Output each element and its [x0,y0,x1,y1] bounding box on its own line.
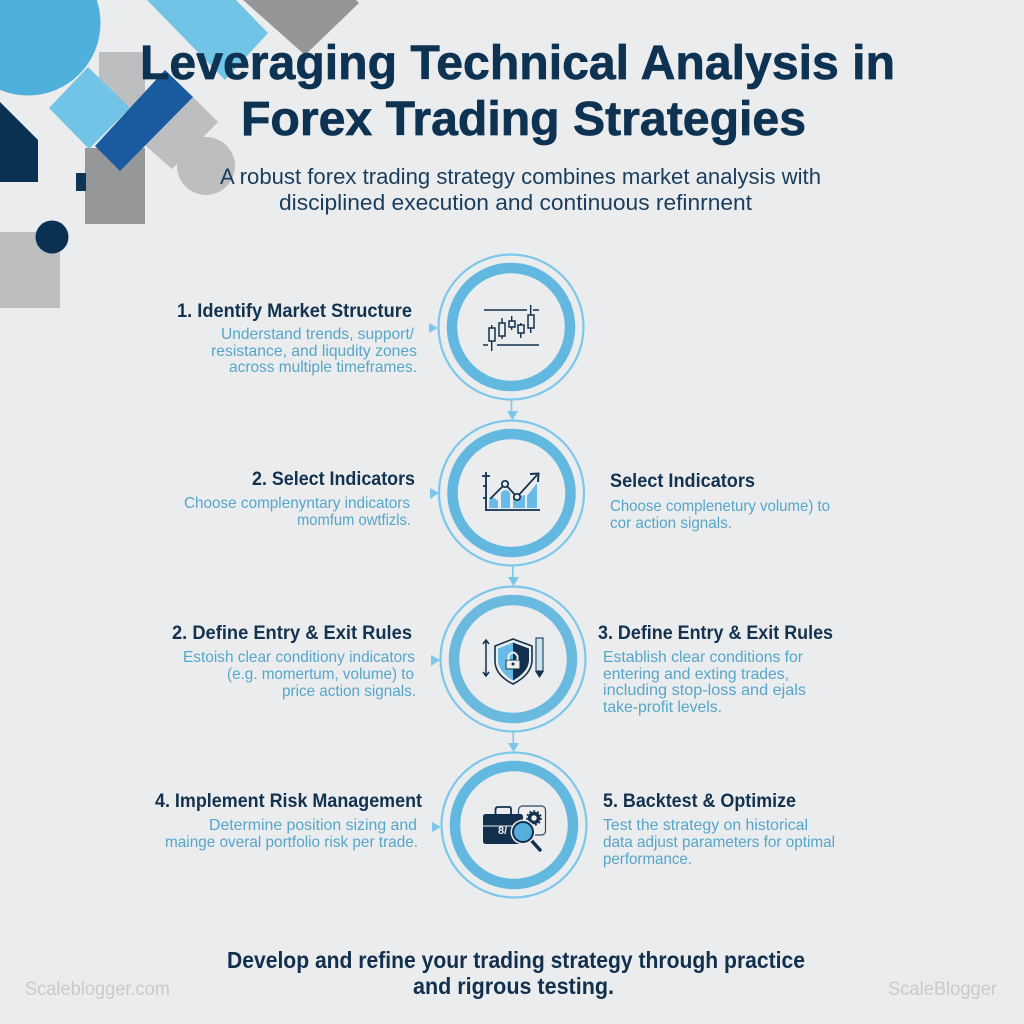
step 3 text, left [172,623,416,700]
title: Leveraging Technical Analysis in [140,36,895,90]
icon: shield with padlock and ruler [483,638,544,684]
step 4 text, left: mainge overal portfolio risk per trade. [165,834,418,851]
step 3 text, left: 2. Define Entry & Exit Rules [172,623,412,644]
step 4 text, left: Determine position sizing and [209,817,417,834]
icon: briefcase, gear and magnifier: 8/ [498,825,507,837]
step 5 text, right [603,791,835,868]
icon: briefcase, gear and magnifier [483,806,546,850]
step 1 text, left [177,301,417,376]
step 5 text, right: data adjust parameters for optimal [603,834,835,851]
step 1 text, left: resistance, and liqudity zones [211,343,417,360]
icon: line and bar chart [482,472,540,511]
step circle 3 [431,586,586,732]
connector arrows between steps [507,400,519,752]
subtitle: A robust forex trading strategy combines market analysis with [220,164,821,189]
step 2 text, right [610,471,830,532]
step circle 2 [430,420,584,566]
step 2 text, left: 2. Select Indicators [252,469,415,490]
step 3 text, right: including stop-loss and ejals [603,682,806,699]
closing call to action [227,947,805,999]
step 1 text, left: across multiple timeframes. [229,359,417,376]
step 3 text, right: take-profit levels. [603,699,722,716]
decorative geometric shapes [0,0,359,308]
step 3 text, left: Estoish clear conditiony indicators [183,649,415,666]
subtitle [220,164,821,215]
step 3 text, left: (e.g. momertum, volume) to [227,666,414,683]
title [140,36,895,146]
step 5 text, right: performance. [603,851,692,868]
step 1 text, left: 1. Identify Market Structure [177,301,412,322]
step 4 text, left [155,791,423,851]
step 2 text, right: Choose complenetury volume) to [610,498,830,515]
step 2 text, right: Select Indicators [610,471,755,492]
step 5 text, right: Test the strategy on historical [603,817,808,834]
closing call to action: Develop and refine your trading strategy through practice [227,947,805,973]
step 2 text, left [184,469,415,529]
watermark left: Scaleblogger.com [25,979,170,1000]
step 3 text, right [598,623,833,716]
closing call to action: and rigrous testing. [413,973,614,999]
step 3 text, right: entering and exting trades, [603,666,789,683]
step 2 text, right: cor action signals. [610,515,732,532]
step 5 text, right: 5. Backtest & Optimize [603,791,796,812]
step 1 text, left: Understand trends, support/ [221,326,415,343]
step 3 text, right: Establish clear conditions for [603,649,804,666]
step 2 text, left: Choose complenyntary indicators [184,495,410,512]
title: Forex Trading Strategies [241,92,806,146]
watermark right: ScaleBlogger [888,979,998,1000]
step 4 text, left: 4. Implement Risk Management [155,791,423,812]
step circle 4 [432,752,586,898]
step 3 text, left: price action signals. [282,683,416,700]
subtitle: disciplined execution and continuous refinrnent [279,190,753,215]
step circle 1 [429,254,584,400]
step 2 text, left: momfum owtfizls. [297,512,411,529]
step 3 text, right: 3. Define Entry & Exit Rules [598,623,833,644]
icon: candlestick chart [483,305,539,351]
